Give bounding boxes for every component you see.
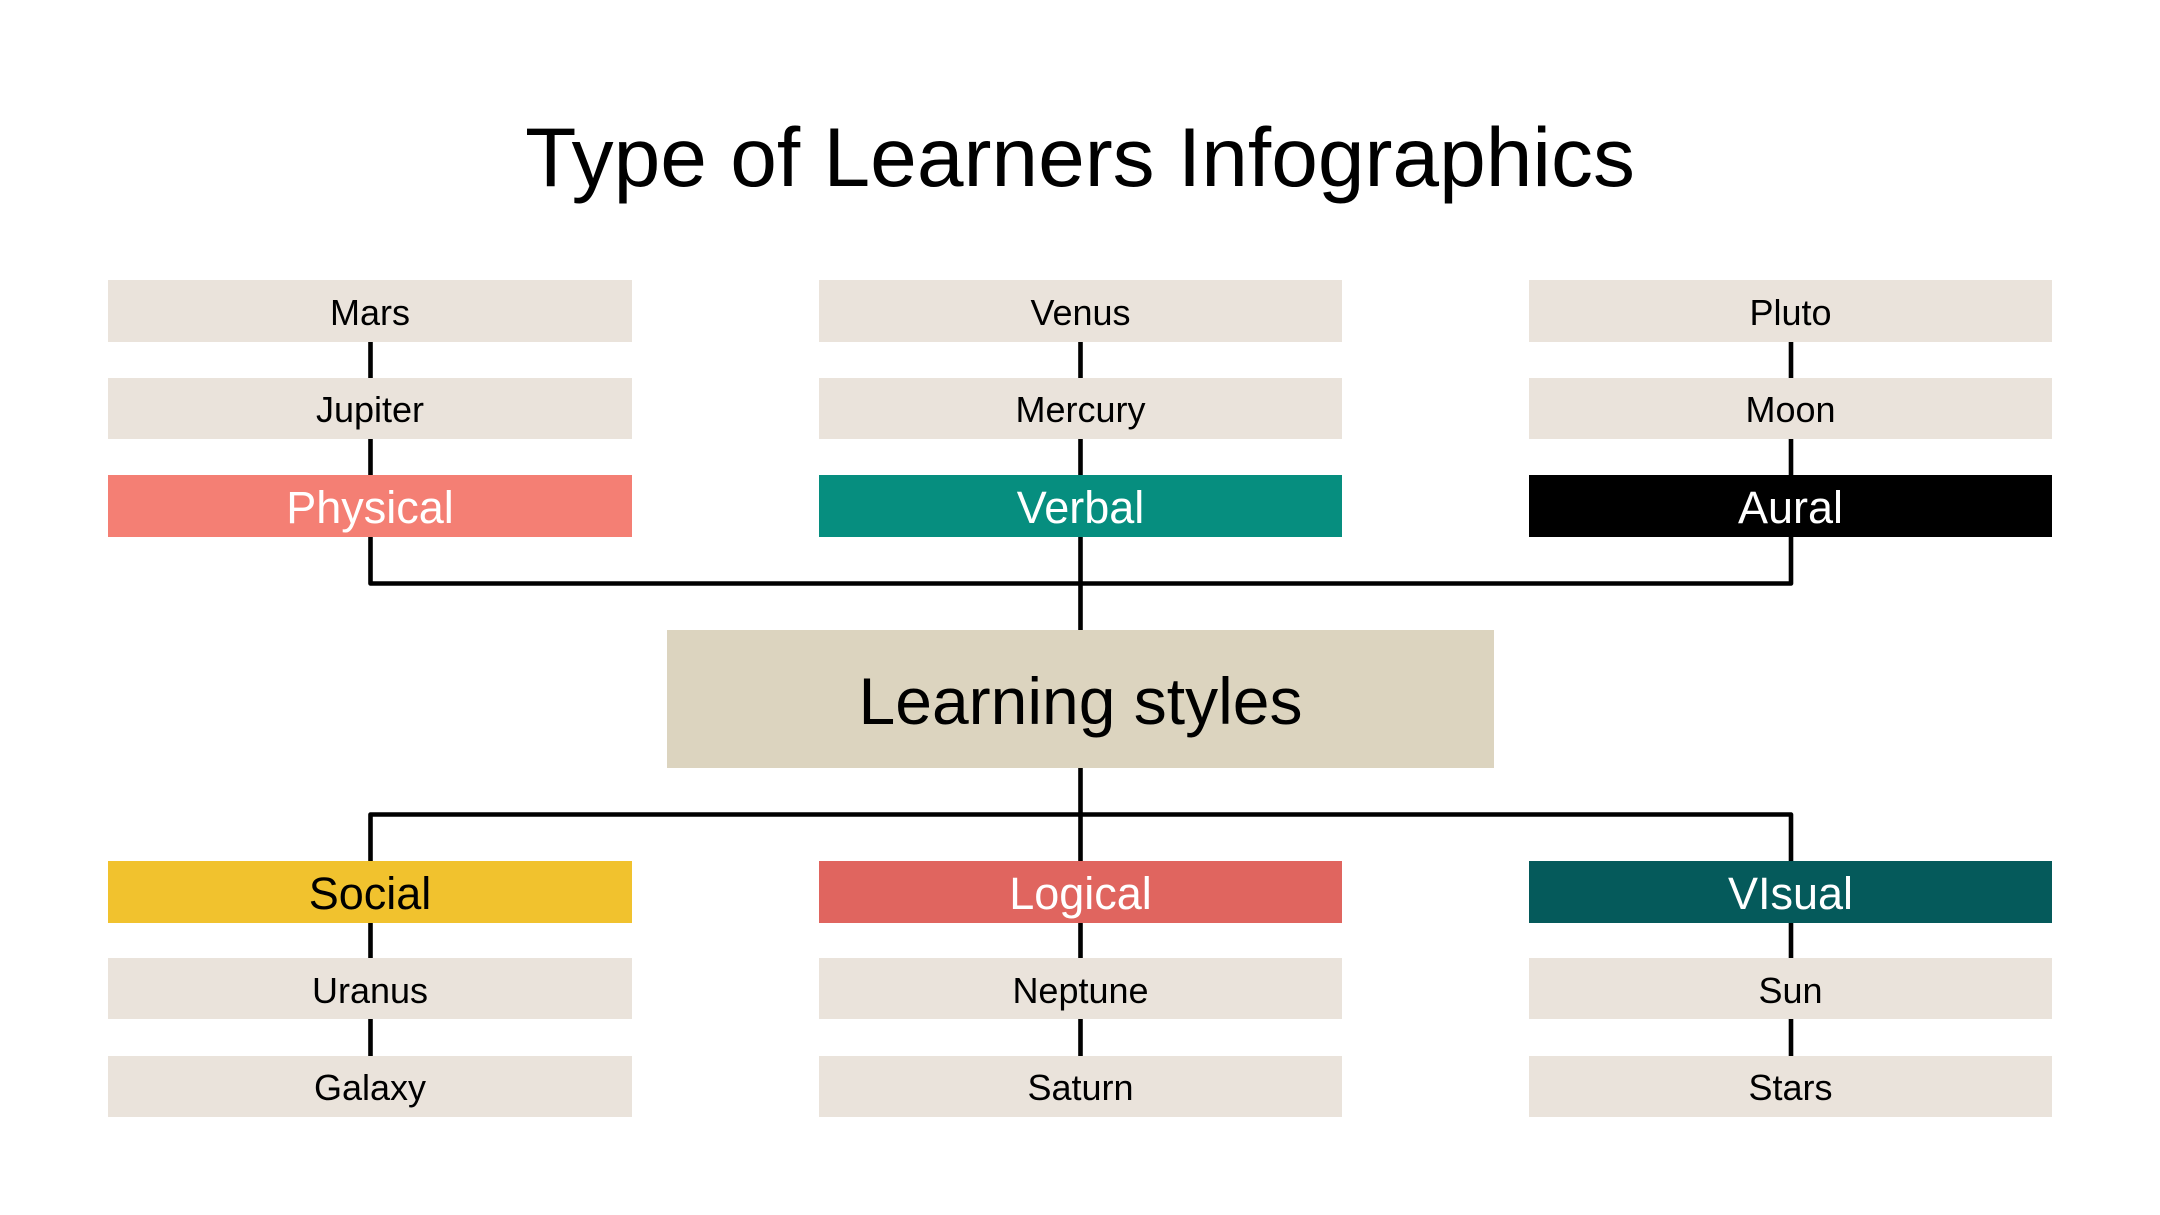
item: Galaxy: Galaxy — [314, 1067, 426, 1108]
heading: Aural: Aural — [1738, 482, 1843, 533]
item: Saturn: Saturn — [1027, 1067, 1134, 1108]
heading: Social — [108, 861, 632, 923]
connectors: bottom item stacks — [370, 923, 1791, 1056]
item: Uranus: Uranus — [312, 970, 428, 1011]
connector: top branches to center box — [370, 536, 1791, 630]
heading: VIsual — [1529, 861, 2052, 923]
connectors: top item stacks — [370, 342, 1791, 475]
panel: Physical branch — [108, 280, 632, 537]
item: Jupiter — [108, 378, 632, 439]
center box: Learning styles — [667, 630, 1494, 768]
item: Sun — [1529, 958, 2052, 1019]
heading: Physical — [108, 475, 632, 537]
heading: Verbal: Verbal — [1017, 482, 1144, 533]
item: Neptune — [819, 958, 1342, 1019]
item: Mercury — [819, 378, 1342, 439]
panel: Logical branch — [819, 861, 1342, 1117]
item: Stars: Stars — [1748, 1067, 1833, 1108]
panel: Aural branch — [1529, 280, 2052, 537]
item: Pluto: Pluto — [1749, 292, 1832, 333]
item: Pluto — [1529, 280, 2052, 342]
heading: Social: Social — [309, 868, 431, 919]
item: Jupiter: Jupiter — [316, 389, 424, 430]
panel: Social branch — [108, 861, 632, 1117]
item: Uranus — [108, 958, 632, 1019]
item: Moon — [1529, 378, 2052, 439]
item: Venus: Venus — [1030, 292, 1131, 333]
item: Stars — [1529, 1056, 2052, 1117]
item: Mercury: Mercury — [1015, 389, 1146, 430]
item: Mars: Mars — [330, 292, 410, 333]
heading: Physical: Physical — [286, 482, 454, 533]
heading: Logical: Logical — [1009, 868, 1152, 919]
heading: Logical — [819, 861, 1342, 923]
connector: center box to bottom branches — [370, 768, 1791, 861]
item: Sun: Sun — [1758, 970, 1823, 1011]
item: Mars — [108, 280, 632, 342]
title: Type of Learners Infographics — [525, 110, 1635, 204]
center box: Learning styles: Learning styles — [859, 664, 1302, 738]
item: Venus — [819, 280, 1342, 342]
panel: Verbal branch — [819, 280, 1342, 537]
heading: VIsual: VIsual — [1728, 868, 1853, 919]
item: Galaxy — [108, 1056, 632, 1117]
item: Moon: Moon — [1745, 389, 1836, 430]
panel: Visual branch — [1529, 861, 2052, 1117]
heading: Verbal — [819, 475, 1342, 537]
heading: Aural — [1529, 475, 2052, 537]
item: Saturn — [819, 1056, 1342, 1117]
item: Neptune: Neptune — [1012, 970, 1149, 1011]
